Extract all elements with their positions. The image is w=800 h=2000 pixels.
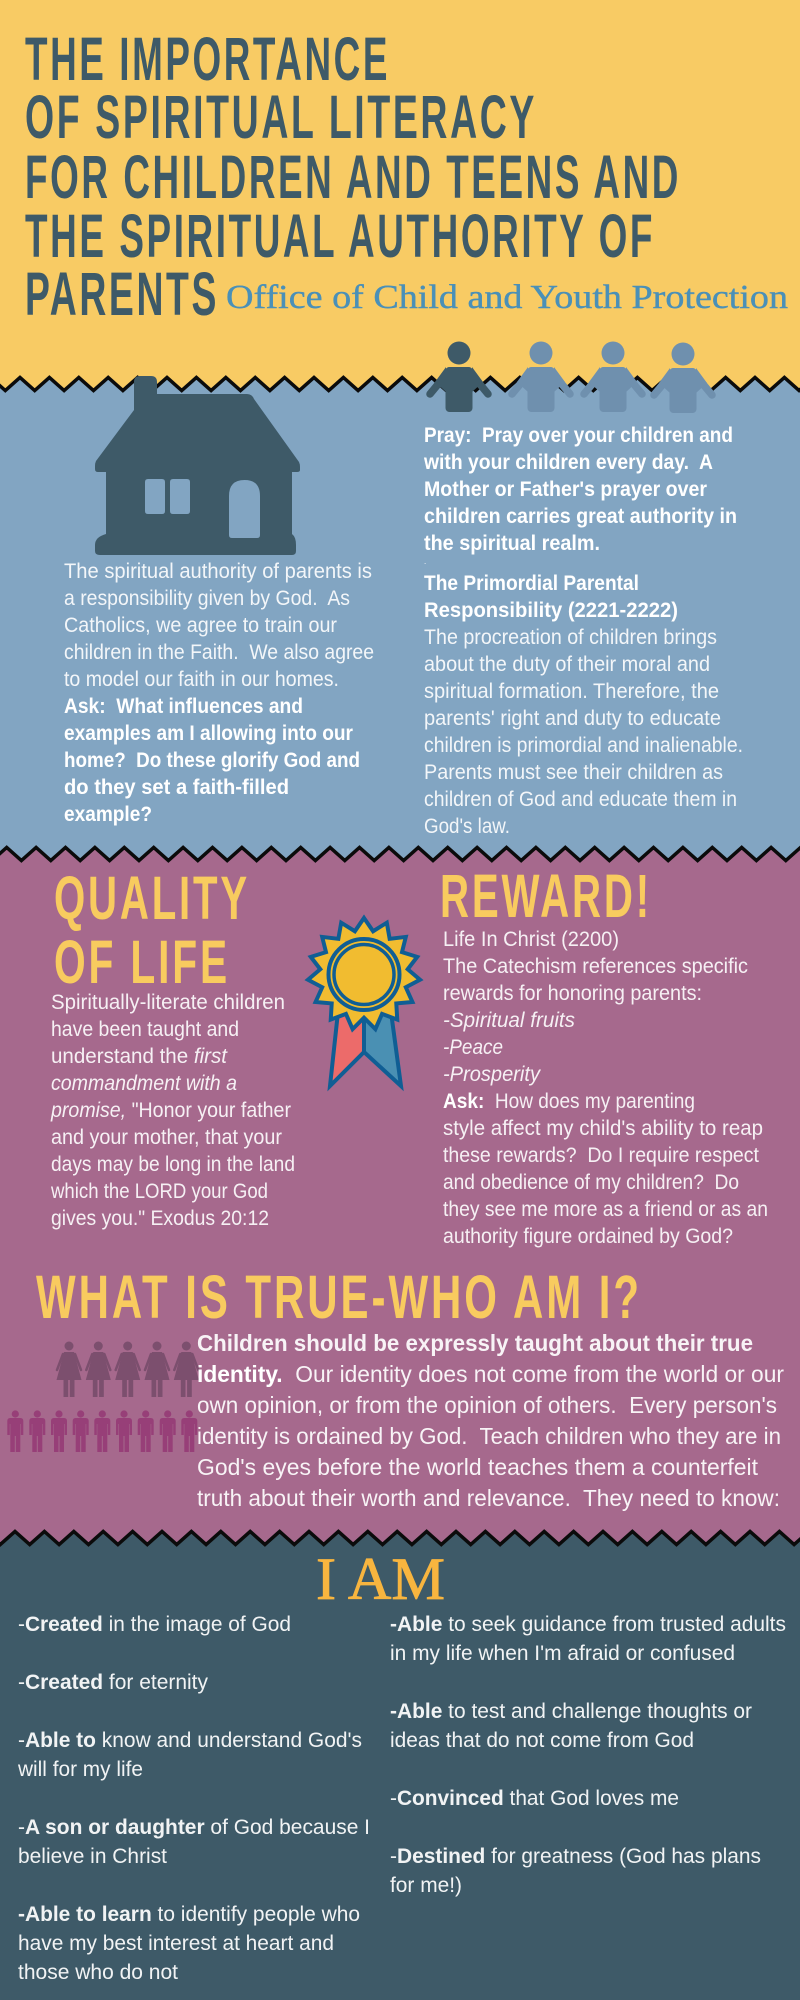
- text: quality of life: Spiritually-literate children: [51, 991, 285, 1014]
- heading: I AM: I AM: [316, 1546, 445, 1612]
- list: right column: -Able to test and challenge thoughts or: [390, 1700, 752, 1723]
- text: primordial parental responsibility: spiritual formation. Therefore, the: [424, 680, 719, 703]
- icon: family of paper-doll figures: [430, 342, 712, 413]
- text: quality of life: commandment with a: [51, 1072, 237, 1095]
- text: parents' authority: The spiritual authority of parents is: [64, 560, 372, 583]
- text: reward: [443, 928, 768, 1248]
- text: reward: these rewards? Do I require respect: [443, 1144, 759, 1167]
- text: parents' authority: to model our faith in our homes.: [64, 668, 339, 691]
- text: primordial parental responsibility: The procreation of children brings: [424, 626, 717, 649]
- text: primordial parental responsibility: The Primordial Parental: [424, 572, 639, 595]
- text: primordial parental responsibility: Parents must see their children as: [424, 761, 723, 784]
- text: parents' authority: [64, 560, 374, 826]
- icon: row of men: [7, 1410, 197, 1452]
- text: primordial parental responsibility: Responsibility (2221-2222): [424, 599, 678, 622]
- text: reward: -Peace: [443, 1036, 503, 1059]
- text: quality of life: days may be long in the land: [51, 1153, 295, 1176]
- list: right column: [390, 1613, 786, 1897]
- list: right column: -Destined for greatness (God has plans: [390, 1845, 761, 1868]
- text: pray: [423, 424, 737, 566]
- list: left column: have my best interest at heart and: [18, 1932, 334, 1955]
- list: right column: in my life when I'm afraid or confused: [390, 1642, 735, 1665]
- text: parents' authority: examples am I allowing into our: [64, 722, 353, 745]
- icon: row of women: [56, 1342, 199, 1397]
- subtitle: Office of Child and Youth Protection: [226, 279, 788, 316]
- text: reward: style affect my child's ability to reap: [443, 1117, 763, 1140]
- text: quality of life: have been taught and: [51, 1018, 239, 1041]
- text: parents' authority: do they set a faith-filled: [64, 776, 289, 799]
- list: right column: for me!): [390, 1874, 462, 1897]
- text: parents' authority: children in the Faith. We also agree: [64, 641, 374, 664]
- list: left column: believe in Christ: [18, 1845, 167, 1868]
- list: right column: ideas that do not come from God: [390, 1729, 694, 1752]
- text: reward: -Spiritual fruits: [443, 1009, 575, 1032]
- text: primordial parental responsibility: children is primordial and inalienable.: [424, 734, 743, 757]
- text: true identity: [197, 1330, 784, 1511]
- text: reward: authority figure ordained by God?: [443, 1225, 733, 1248]
- text: reward: they see me more as a friend or as an: [443, 1198, 768, 1221]
- text: quality of life: which the LORD your God: [50, 1180, 268, 1203]
- text: parents' authority: home? Do these glorify God and: [64, 749, 360, 772]
- text: parents' authority: Ask: What influences and: [64, 695, 303, 718]
- text: quality of life: promise, "Honor your father: [50, 1099, 291, 1122]
- text: pray: children carries great authority in: [424, 505, 737, 528]
- list: left column: -Created in the image of God: [18, 1613, 291, 1636]
- text: pray: Mother or Father's prayer over: [424, 478, 707, 501]
- heading: quality of life: OF LIFE: [54, 928, 230, 996]
- text: reward: The Catechism references specific: [443, 955, 748, 978]
- text: parents' authority: Catholics, we agree to train our: [64, 614, 337, 637]
- text: reward: rewards for honoring parents:: [443, 982, 702, 1005]
- text: true identity: identity. Our identity does not come from the world or our: [197, 1361, 784, 1387]
- text: primordial parental responsibility: [424, 572, 743, 838]
- list: left column: -Able to know and understand God's: [18, 1729, 362, 1752]
- title: [25, 25, 681, 328]
- list: right column: -Able to seek guidance from trusted adults: [390, 1613, 786, 1636]
- text: reward: -Prosperity: [443, 1063, 541, 1086]
- text: pray: .: [424, 557, 426, 566]
- panel: I am list: [0, 1532, 800, 2000]
- text: pray: Pray: Pray over your children and: [424, 424, 733, 447]
- heading: quality of life: QUALITY: [54, 864, 250, 932]
- icon: award ribbon: [308, 918, 420, 1086]
- text: primordial parental responsibility: parents' right and duty to educate: [424, 707, 721, 730]
- text: parents' authority: a responsibility given by God. As: [64, 587, 350, 610]
- text: quality of life: gives you." Exodus 20:12: [51, 1207, 269, 1230]
- text: reward: and obedience of my children? Do: [443, 1171, 739, 1194]
- list: right column: -Convinced that God loves me: [390, 1787, 679, 1810]
- title: THE IMPORTANCE: [25, 25, 390, 93]
- text: reward: Life In Christ (2200): [443, 928, 619, 951]
- panel: quality of life, reward and identity: [0, 848, 800, 1549]
- text: pray: the spiritual realm.: [424, 532, 600, 555]
- text: parents' authority: example?: [64, 803, 152, 826]
- list: left column: -Able to learn to identify people who: [18, 1903, 360, 1926]
- icon: house: [95, 376, 300, 555]
- text: pray: with your children every day. A: [423, 451, 713, 474]
- text: primordial parental responsibility: God's law.: [424, 815, 510, 838]
- panel: spiritual authority of parents: [0, 342, 800, 869]
- text: true identity: own opinion, or from the opinion of others. Every person's: [197, 1392, 777, 1418]
- list: left column: [17, 1613, 370, 1984]
- text: true identity: Children should be expressly taught about their true: [197, 1330, 753, 1356]
- list: left column: -A son or daughter of God because I: [18, 1816, 370, 1839]
- text: true identity: God's eyes before the world teaches them a counterfeit: [197, 1454, 759, 1480]
- text: true identity: identity is ordained by God. Teach children who they are in: [197, 1423, 781, 1449]
- list: left column: those who do not: [18, 1961, 178, 1984]
- text: quality of life: and your mother, that your: [51, 1126, 282, 1149]
- text: reward: Ask: How does my parenting: [443, 1090, 695, 1113]
- heading: reward: REWARD!: [440, 862, 652, 930]
- list: left column: -Created for eternity: [18, 1671, 208, 1694]
- text: primordial parental responsibility: about the duty of their moral and: [424, 653, 710, 676]
- text: true identity: truth about their worth and relevance. They need to know:: [197, 1485, 780, 1511]
- text: quality of life: understand the first: [51, 1045, 228, 1068]
- list: left column: will for my life: [17, 1758, 143, 1781]
- panel: header: [0, 0, 800, 400]
- text: quality of life: [50, 991, 295, 1230]
- title: PARENTS: [25, 260, 219, 328]
- text: primordial parental responsibility: children of God and educate them in: [424, 788, 737, 811]
- heading: quality of life: [54, 864, 250, 996]
